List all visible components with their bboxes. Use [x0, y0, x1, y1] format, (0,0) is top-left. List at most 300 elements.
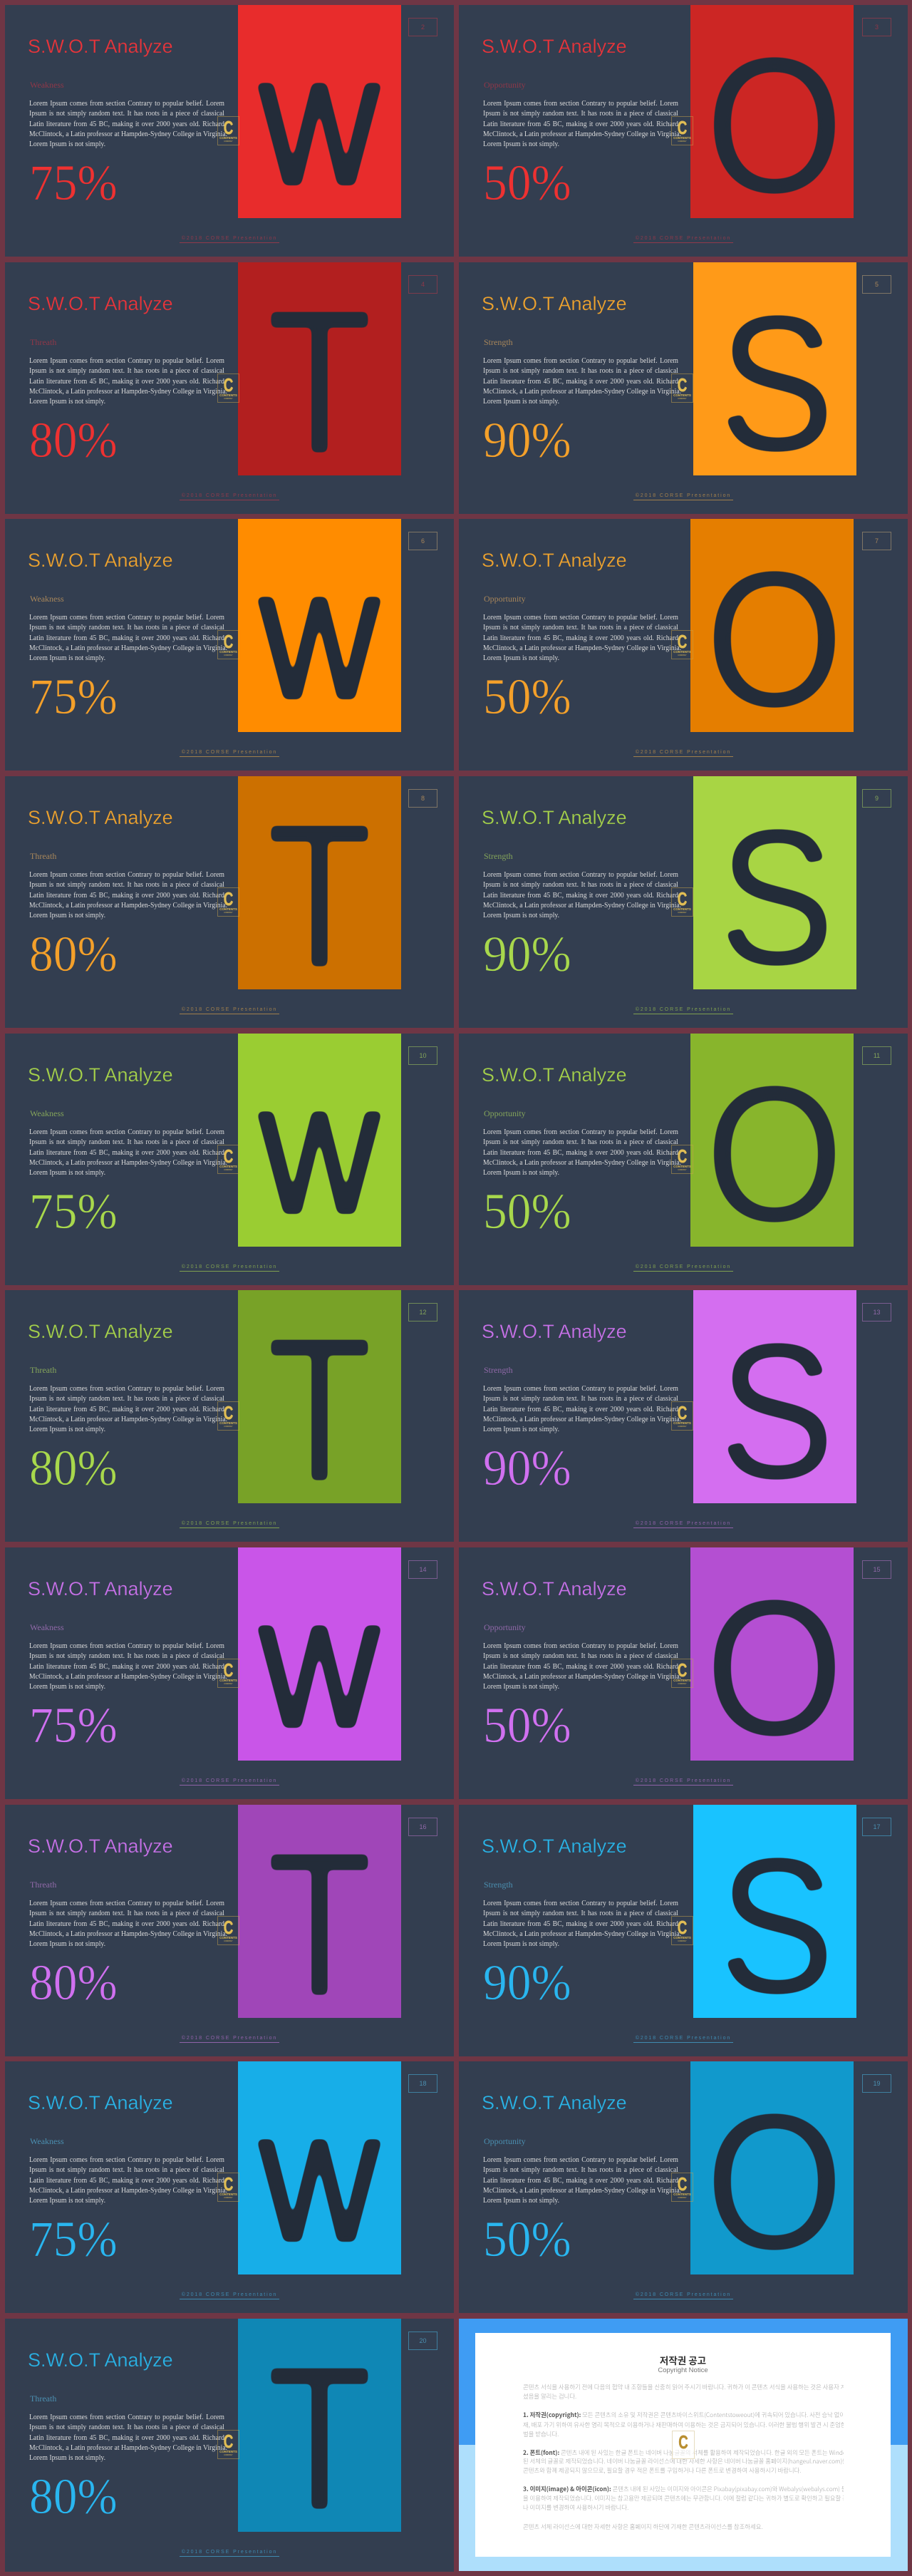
body text: Ipsum is not simply random text. It has roots in a piece of classical: [29, 1652, 224, 1660]
logo badge: COMPANY: [224, 398, 233, 400]
body text: Latin literature from 45 BC, making it over 2000 years old. Richard: [29, 2177, 224, 2184]
title: S.W.O.T Analyze: [28, 1321, 173, 1342]
title: S.W.O.T Analyze: [28, 550, 173, 571]
logo badge: C: [224, 631, 233, 652]
body text: Lorem Ipsum comes from section Contrary to popular belief. Lorem: [483, 614, 678, 622]
page number: [862, 275, 891, 294]
body text: Lorem Ipsum comes from section Contrary to popular belief. Lorem: [483, 100, 678, 108]
body text: McClintock, a Latin professor at Hampden-Sydney College in Virginia.: [29, 1416, 227, 1423]
logo badge: [672, 2431, 695, 2459]
letter tile: W: W: [259, 569, 380, 728]
body text: Lorem Ipsum comes from section Contrary to popular belief. Lorem: [29, 1900, 224, 1907]
page number: 12: [419, 1309, 426, 1316]
body text: Latin literature from 45 BC, making it over 2000 years old. Richard: [29, 891, 224, 900]
title: S.W.O.T Analyze: [28, 1578, 173, 1599]
body text: Latin literature from 45 BC, making it over 2000 years old. Richard: [29, 120, 224, 128]
logo badge: CONTENTS: [673, 1679, 691, 1682]
page number: [408, 1046, 437, 1065]
body text: [29, 1385, 227, 1433]
body text: Lorem Ipsum is not simply.: [29, 654, 105, 662]
logo badge: COMPANY: [224, 2454, 233, 2456]
body text: Latin literature from 45 BC, making it over 2000 years old. Richard: [483, 1406, 678, 1413]
body text: Ipsum is not simply random text. It has roots in a piece of classical: [29, 1138, 224, 1146]
logo badge: C: [224, 374, 233, 396]
body text: Lorem Ipsum comes from section Contrary to popular belief. Lorem: [483, 357, 678, 365]
percentage: 50%: [483, 1184, 571, 1240]
page number: 19: [873, 2080, 881, 2087]
logo badge: C: [224, 1145, 233, 1167]
percentage: 80%: [29, 927, 118, 982]
logo badge: COMPANY: [678, 1683, 687, 1685]
letter tile: S: [693, 1290, 856, 1503]
letter tile: S: S: [719, 276, 834, 491]
body text: McClintock, a Latin professor at Hampden-Sydney College in Virginia.: [483, 902, 681, 910]
footer: ©2018 CORSE Presentation: [182, 1007, 277, 1012]
body text: Lorem Ipsum is not simply.: [29, 1940, 105, 1948]
body text: Lorem Ipsum comes from section Contrary to popular belief. Lorem: [483, 2156, 678, 2164]
body text: McClintock, a Latin professor at Hampden-Sydney College in Virginia.: [483, 130, 681, 138]
logo badge: C: [678, 1659, 687, 1681]
footer: ©2018 CORSE Presentation: [182, 2550, 277, 2555]
letter tile: W: W: [259, 1597, 380, 1756]
body text: Ipsum is not simply random text. It has roots in a piece of classical: [29, 1910, 224, 1917]
body text: [483, 357, 681, 406]
logo badge: [671, 887, 693, 917]
body text: Latin literature from 45 BC, making it over 2000 years old. Richard: [483, 2177, 678, 2184]
page number: 16: [419, 1823, 426, 1830]
title: S.W.O.T Analyze: [28, 1835, 173, 1857]
body text: Latin literature from 45 BC, making it over 2000 years old. Richard: [29, 1149, 224, 1156]
body text: Ipsum is not simply random text. It has roots in a piece of classical: [29, 881, 224, 889]
body text: Ipsum is not simply random text. It has roots in a piece of classical: [29, 1395, 224, 1403]
footer: ©2018 CORSE Presentation: [636, 1521, 731, 1526]
footer: ©2018 CORSE Presentation: [182, 750, 277, 755]
footer: [633, 2035, 733, 2043]
footer: [633, 235, 733, 243]
body text: Lorem Ipsum comes from section Contrary to popular belief. Lorem: [483, 1642, 678, 1650]
body text: [29, 1900, 227, 1948]
body text: Ipsum is not simply random text. It has roots in a piece of classical: [29, 2423, 224, 2431]
letter tile: W: [238, 1034, 401, 1247]
body text: McClintock, a Latin professor at Hampden-Sydney College in Virginia.: [29, 644, 227, 652]
page number: [408, 275, 437, 294]
body text: [29, 614, 227, 662]
logo badge: [671, 2173, 693, 2202]
title: S.W.O.T Analyze: [28, 807, 173, 828]
title: S.W.O.T Analyze: [482, 550, 627, 571]
body text: Ipsum is not simply random text. It has roots in a piece of classical: [483, 2166, 678, 2174]
letter tile: T: T: [267, 1296, 372, 1523]
body text: McClintock, a Latin professor at Hampden-Sydney College in Virginia.: [483, 1930, 681, 1938]
footer: [180, 749, 279, 757]
logo badge: COMPANY: [224, 1426, 233, 1428]
footer: ©2018 CORSE Presentation: [182, 2292, 277, 2297]
footer: ©2018 CORSE Presentation: [182, 1521, 277, 1526]
logo badge: CONTENTS: [219, 136, 237, 140]
panel: slide 9, Strength: [459, 776, 908, 1028]
panel: slide 5, Strength: [459, 262, 908, 514]
panel: slide 18, Weakness: [5, 2061, 454, 2313]
letter tile: S: [693, 262, 856, 475]
body text: [29, 2156, 227, 2205]
logo badge: COMPANY: [224, 140, 233, 143]
logo badge: C: [678, 374, 687, 396]
body text: Lorem Ipsum comes from section Contrary to popular belief. Lorem: [29, 2413, 224, 2421]
body text: Latin literature from 45 BC, making it over 2000 years old. Richard: [29, 2433, 224, 2442]
page number: [408, 18, 437, 36]
panel: slide 6, Weakness: [5, 519, 454, 771]
body text: [29, 1642, 227, 1691]
letter tile: T: [238, 1290, 401, 1503]
logo badge: C: [678, 1402, 687, 1423]
logo badge: CONTENTS: [673, 136, 691, 140]
page number: [862, 1818, 891, 1836]
title: S.W.O.T Analyze: [28, 2349, 173, 2371]
footer: ©2018 CORSE Presentation: [182, 1264, 277, 1269]
footer: [180, 493, 279, 500]
letter tile: O: O: [705, 17, 844, 232]
footer: ©2018 CORSE Presentation: [636, 1264, 731, 1269]
body text: [29, 871, 227, 919]
subheading: Opportunity: [484, 594, 526, 604]
logo badge: C: [224, 117, 233, 138]
percentage: 75%: [29, 2212, 118, 2267]
footer: [633, 1264, 733, 1272]
page number: 4: [421, 281, 425, 288]
percentage: 75%: [29, 1698, 118, 1753]
body text: Lorem Ipsum is not simply.: [483, 1426, 559, 1433]
subheading: Strength: [484, 337, 513, 347]
clause 3 line 3: 나 이미지를 변경하여 사용하시기 바랍니다.: [523, 2503, 628, 2512]
subheading: Threath: [30, 337, 56, 347]
body text: Lorem Ipsum is not simply.: [483, 140, 559, 148]
letter tile: W: W: [259, 2111, 380, 2270]
logo badge: C: [678, 2431, 688, 2453]
page number: [408, 1303, 437, 1322]
subheading: Threath: [30, 1880, 56, 1890]
body text: Lorem Ipsum comes from section Contrary to popular belief. Lorem: [483, 1128, 678, 1136]
logo badge: CONTENTS: [219, 907, 237, 911]
body text: [483, 1385, 681, 1433]
body text: Latin literature from 45 BC, making it over 2000 years old. Richard: [29, 634, 224, 642]
panel: slide 7, Opportunity: [459, 519, 908, 771]
body text: Latin literature from 45 BC, making it over 2000 years old. Richard: [29, 1406, 224, 1413]
page number: 8: [421, 795, 425, 802]
body text: Lorem Ipsum comes from section Contrary to popular belief. Lorem: [29, 1385, 224, 1393]
footer: ©2018 CORSE Presentation: [636, 1007, 731, 1012]
logo badge: C: [678, 888, 687, 910]
subheading: Weakness: [30, 1622, 64, 1632]
body text: McClintock, a Latin professor at Hampden-Sydney College in Virginia.: [483, 644, 681, 652]
page number: [408, 1818, 437, 1836]
logo badge: [217, 1916, 239, 1945]
percentage: 80%: [29, 413, 118, 468]
panel: slide 13, Strength: [459, 1290, 908, 1542]
letter tile: S: S: [719, 1304, 834, 1519]
logo badge: C: [224, 1917, 233, 1938]
body text: Lorem Ipsum comes from section Contrary to popular belief. Lorem: [29, 100, 224, 108]
page number: [862, 1303, 891, 1322]
panel: slide 16, Threat: [5, 1805, 454, 2056]
page number: 9: [875, 795, 879, 802]
percentage: 80%: [29, 2469, 118, 2525]
percentage: 75%: [29, 1184, 118, 1240]
percentage: 90%: [483, 1955, 571, 2011]
body text: Lorem Ipsum comes from section Contrary to popular belief. Lorem: [29, 871, 224, 879]
title: S.W.O.T Analyze: [482, 293, 627, 314]
body text: Ipsum is not simply random text. It has roots in a piece of classical: [483, 624, 678, 632]
body text: Lorem Ipsum comes from section Contrary to popular belief. Lorem: [483, 1900, 678, 1907]
logo badge: COMPANY: [678, 140, 687, 143]
subheading: Strength: [484, 1365, 513, 1375]
logo badge: C: [224, 1402, 233, 1423]
body text: Lorem Ipsum comes from section Contrary to popular belief. Lorem: [29, 614, 224, 622]
body text: Lorem Ipsum is not simply.: [29, 2197, 105, 2205]
footer: ©2018 CORSE Presentation: [636, 1778, 731, 1783]
letter tile: W: [238, 2061, 401, 2274]
footer: [180, 1778, 279, 1786]
letter tile: W: W: [259, 1083, 380, 1242]
body text: McClintock, a Latin professor at Hampden-Sydney College in Virginia.: [29, 2444, 227, 2452]
page number: [408, 2332, 437, 2350]
clause 2 line 3: 콘텐츠와 함께 제공되지 않으므로, 필요할 경우 적은 폰트를 구입하거나 다른 폰트로 변경하여 사용하시기 바랍니다.: [523, 2466, 801, 2475]
panel: slide 20, Threat: [5, 2319, 454, 2572]
footer: [180, 2292, 279, 2299]
panel: copyright notice: [459, 2319, 908, 2571]
body text: Ipsum is not simply random text. It has roots in a piece of classical: [29, 110, 224, 118]
panel: slide 4, Threat: [5, 262, 454, 514]
body text: Lorem Ipsum is not simply.: [483, 2197, 559, 2205]
body text: Latin literature from 45 BC, making it over 2000 years old. Richard: [483, 1149, 678, 1156]
logo badge: COMPANY: [224, 1169, 233, 1171]
body text: McClintock, a Latin professor at Hampden-Sydney College in Virginia.: [29, 1159, 227, 1167]
logo badge: COMPANY: [678, 2197, 687, 2199]
body text: Ipsum is not simply random text. It has roots in a piece of classical: [29, 2166, 224, 2174]
logo badge: [671, 1401, 693, 1431]
page number: 7: [875, 537, 879, 545]
page number: 2: [421, 24, 425, 31]
body text: Ipsum is not simply random text. It has roots in a piece of classical: [483, 1652, 678, 1660]
body text: McClintock, a Latin professor at Hampden-Sydney College in Virginia.: [29, 2187, 227, 2195]
page number: [408, 2074, 437, 2093]
body text: Latin literature from 45 BC, making it over 2000 years old. Richard: [29, 378, 224, 385]
body text: Lorem Ipsum comes from section Contrary to popular belief. Lorem: [483, 871, 678, 879]
footer: [633, 749, 733, 757]
page number: [862, 2074, 891, 2093]
logo badge: CONTENTS: [219, 2193, 237, 2196]
page number: 6: [421, 537, 425, 545]
panel: slide 11, Opportunity: [459, 1034, 908, 1285]
letter tile: W: [238, 5, 401, 218]
logo badge: [671, 1916, 693, 1945]
body text: Latin literature from 45 BC, making it over 2000 years old. Richard: [483, 378, 678, 385]
body text: Ipsum is not simply random text. It has roots in a piece of classical: [29, 367, 224, 375]
logo badge: CONTENTS: [219, 1936, 237, 1939]
logo badge: [217, 1659, 239, 1688]
logo badge: [217, 373, 239, 403]
title: S.W.O.T Analyze: [482, 1321, 627, 1342]
title: S.W.O.T Analyze: [482, 1835, 627, 1857]
logo badge: CONTENTS: [219, 1421, 237, 1425]
logo badge: COMPANY: [224, 1940, 233, 1942]
letter tile: T: [238, 776, 401, 989]
notice subheading: Copyright Notice: [658, 2366, 708, 2374]
body text: Latin literature from 45 BC, making it over 2000 years old. Richard: [483, 634, 678, 642]
footer: [633, 493, 733, 500]
page number: [862, 1046, 891, 1065]
footer: ©2018 CORSE Presentation: [636, 2292, 731, 2297]
logo badge: C: [678, 117, 687, 138]
body text: Lorem Ipsum comes from section Contrary to popular belief. Lorem: [29, 1642, 224, 1650]
logo badge: [217, 1401, 239, 1431]
body text: Lorem Ipsum is not simply.: [29, 140, 105, 148]
body text: Lorem Ipsum comes from section Contrary to popular belief. Lorem: [483, 1385, 678, 1393]
panel: slide 3, Opportunity: [459, 5, 908, 257]
page number: 11: [874, 1052, 880, 1059]
logo badge: C: [224, 888, 233, 910]
logo badge: [217, 116, 239, 145]
subheading: Opportunity: [484, 2136, 526, 2146]
letter tile: T: [238, 262, 401, 475]
logo badge: CONTENTS: [219, 393, 237, 397]
footer: ©2018 CORSE Presentation: [182, 236, 277, 241]
logo badge: COMPANY: [224, 1683, 233, 1685]
body text: McClintock, a Latin professor at Hampden-Sydney College in Virginia.: [29, 1930, 227, 1938]
footer: [180, 2035, 279, 2043]
title: S.W.O.T Analyze: [28, 2092, 173, 2113]
body text: Latin literature from 45 BC, making it over 2000 years old. Richard: [483, 1920, 678, 1927]
body text: Lorem Ipsum is not simply.: [29, 912, 105, 919]
body text: McClintock, a Latin professor at Hampden-Sydney College in Virginia.: [29, 388, 227, 396]
body text: Lorem Ipsum is not simply.: [483, 1683, 559, 1691]
percentage: 80%: [29, 1955, 118, 2011]
percentage: 50%: [483, 1698, 571, 1753]
logo badge: C: [224, 1659, 233, 1681]
footer: ©2018 CORSE Presentation: [636, 236, 731, 241]
logo badge: [671, 373, 693, 403]
body text: McClintock, a Latin professor at Hampden-Sydney College in Virginia.: [29, 1673, 227, 1681]
logo badge: CONTENTS: [673, 650, 691, 654]
logo badge: CONTENTS: [673, 393, 691, 397]
body text: Lorem Ipsum is not simply.: [29, 1426, 105, 1433]
body text: Lorem Ipsum comes from section Contrary to popular belief. Lorem: [29, 1128, 224, 1136]
page number: [862, 789, 891, 808]
letter tile: S: S: [719, 1818, 834, 2034]
subheading: Opportunity: [484, 1108, 526, 1118]
page number: [408, 1560, 437, 1579]
body text: McClintock, a Latin professor at Hampden-Sydney College in Virginia.: [483, 2187, 681, 2195]
title: S.W.O.T Analyze: [28, 293, 173, 314]
page number: [408, 532, 437, 550]
logo badge: CONTENTS: [673, 1421, 691, 1425]
body text: McClintock, a Latin professor at Hampden-Sydney College in Virginia.: [29, 902, 227, 910]
body text: Ipsum is not simply random text. It has roots in a piece of classical: [29, 624, 224, 632]
footer: ©2018 CORSE Presentation: [182, 2036, 277, 2041]
body text: Lorem Ipsum is not simply.: [483, 912, 559, 919]
body text: Lorem Ipsum is not simply.: [483, 1169, 559, 1177]
body text: [483, 614, 681, 662]
panel: slide 8, Threat: [5, 776, 454, 1028]
percentage: 50%: [483, 669, 571, 725]
panel: slide 12, Threat: [5, 1290, 454, 1542]
panel: slide 14, Weakness: [5, 1547, 454, 1799]
title: S.W.O.T Analyze: [482, 807, 627, 828]
logo badge: C: [678, 1917, 687, 1938]
subheading: Threath: [30, 2394, 56, 2404]
title: S.W.O.T Analyze: [482, 36, 627, 57]
notice heading: 저작권 공고: [660, 2353, 706, 2367]
page number: 14: [419, 1566, 426, 1573]
letter tile: T: [238, 1805, 401, 2018]
body text: Lorem Ipsum comes from section Contrary to popular belief. Lorem: [29, 357, 224, 365]
logo badge: C: [224, 2431, 233, 2452]
body text: Lorem Ipsum is not simply.: [483, 1940, 559, 1948]
page number: 10: [419, 1052, 426, 1059]
page number: [862, 1560, 891, 1579]
subheading: Opportunity: [484, 1622, 526, 1632]
subheading: Threath: [30, 1365, 56, 1375]
page number: [862, 18, 891, 36]
letter tile: O: O: [705, 531, 844, 746]
letter tile: T: T: [267, 2324, 372, 2552]
logo badge: COMPANY: [224, 2197, 233, 2199]
logo badge: [217, 2173, 239, 2202]
body text: Ipsum is not simply random text. It has roots in a piece of classical: [483, 881, 678, 889]
body text: Latin literature from 45 BC, making it over 2000 years old. Richard: [29, 1662, 224, 1671]
letter tile: T: [238, 2319, 401, 2532]
logo badge: CONTENTS: [673, 1936, 691, 1939]
letter tile: T: T: [267, 1810, 372, 2038]
letter tile: O: O: [705, 1560, 844, 1775]
footer: ©2018 CORSE Presentation: [636, 493, 731, 498]
logo badge: COMPANY: [224, 912, 233, 914]
letter tile: W: [238, 1547, 401, 1761]
letter tile: T: T: [267, 782, 372, 1009]
clause 1 line 3: 벌을 받습니다.: [523, 2430, 559, 2438]
letter tile: S: S: [719, 790, 834, 1005]
body text: Ipsum is not simply random text. It has roots in a piece of classical: [483, 1138, 678, 1146]
body text: Lorem Ipsum is not simply.: [29, 1683, 105, 1691]
logo badge: [217, 1145, 239, 1174]
body text: Lorem Ipsum is not simply.: [483, 654, 559, 662]
page number: 5: [875, 281, 879, 288]
page number: 17: [873, 1823, 881, 1830]
letter tile: O: O: [705, 1046, 844, 1261]
body text: Lorem Ipsum is not simply.: [29, 398, 105, 406]
letter tile: T: T: [267, 268, 372, 495]
body text: McClintock, a Latin professor at Hampden-Sydney College in Virginia.: [483, 388, 681, 396]
logo badge: CONTENTS: [673, 907, 691, 911]
footer: ©2018 CORSE Presentation: [636, 2036, 731, 2041]
logo badge: [671, 1659, 693, 1688]
body text: [29, 100, 227, 148]
footer: ©2018 CORSE Presentation: [636, 750, 731, 755]
footer: [633, 1006, 733, 1014]
logo badge: COMPANY: [678, 912, 687, 914]
logo badge: COMPANY: [224, 654, 233, 656]
page number: 13: [873, 1309, 881, 1316]
page number: [862, 532, 891, 550]
footer: [180, 1520, 279, 1528]
footer: [633, 1778, 733, 1786]
body text: [483, 2156, 681, 2205]
title: S.W.O.T Analyze: [482, 1064, 627, 1086]
letter tile: O: O: [705, 2073, 844, 2289]
panel: slide 2, Weakness: [5, 5, 454, 257]
body text: [483, 1128, 681, 1177]
subheading: Opportunity: [484, 80, 526, 90]
subheading: Strength: [484, 851, 513, 861]
